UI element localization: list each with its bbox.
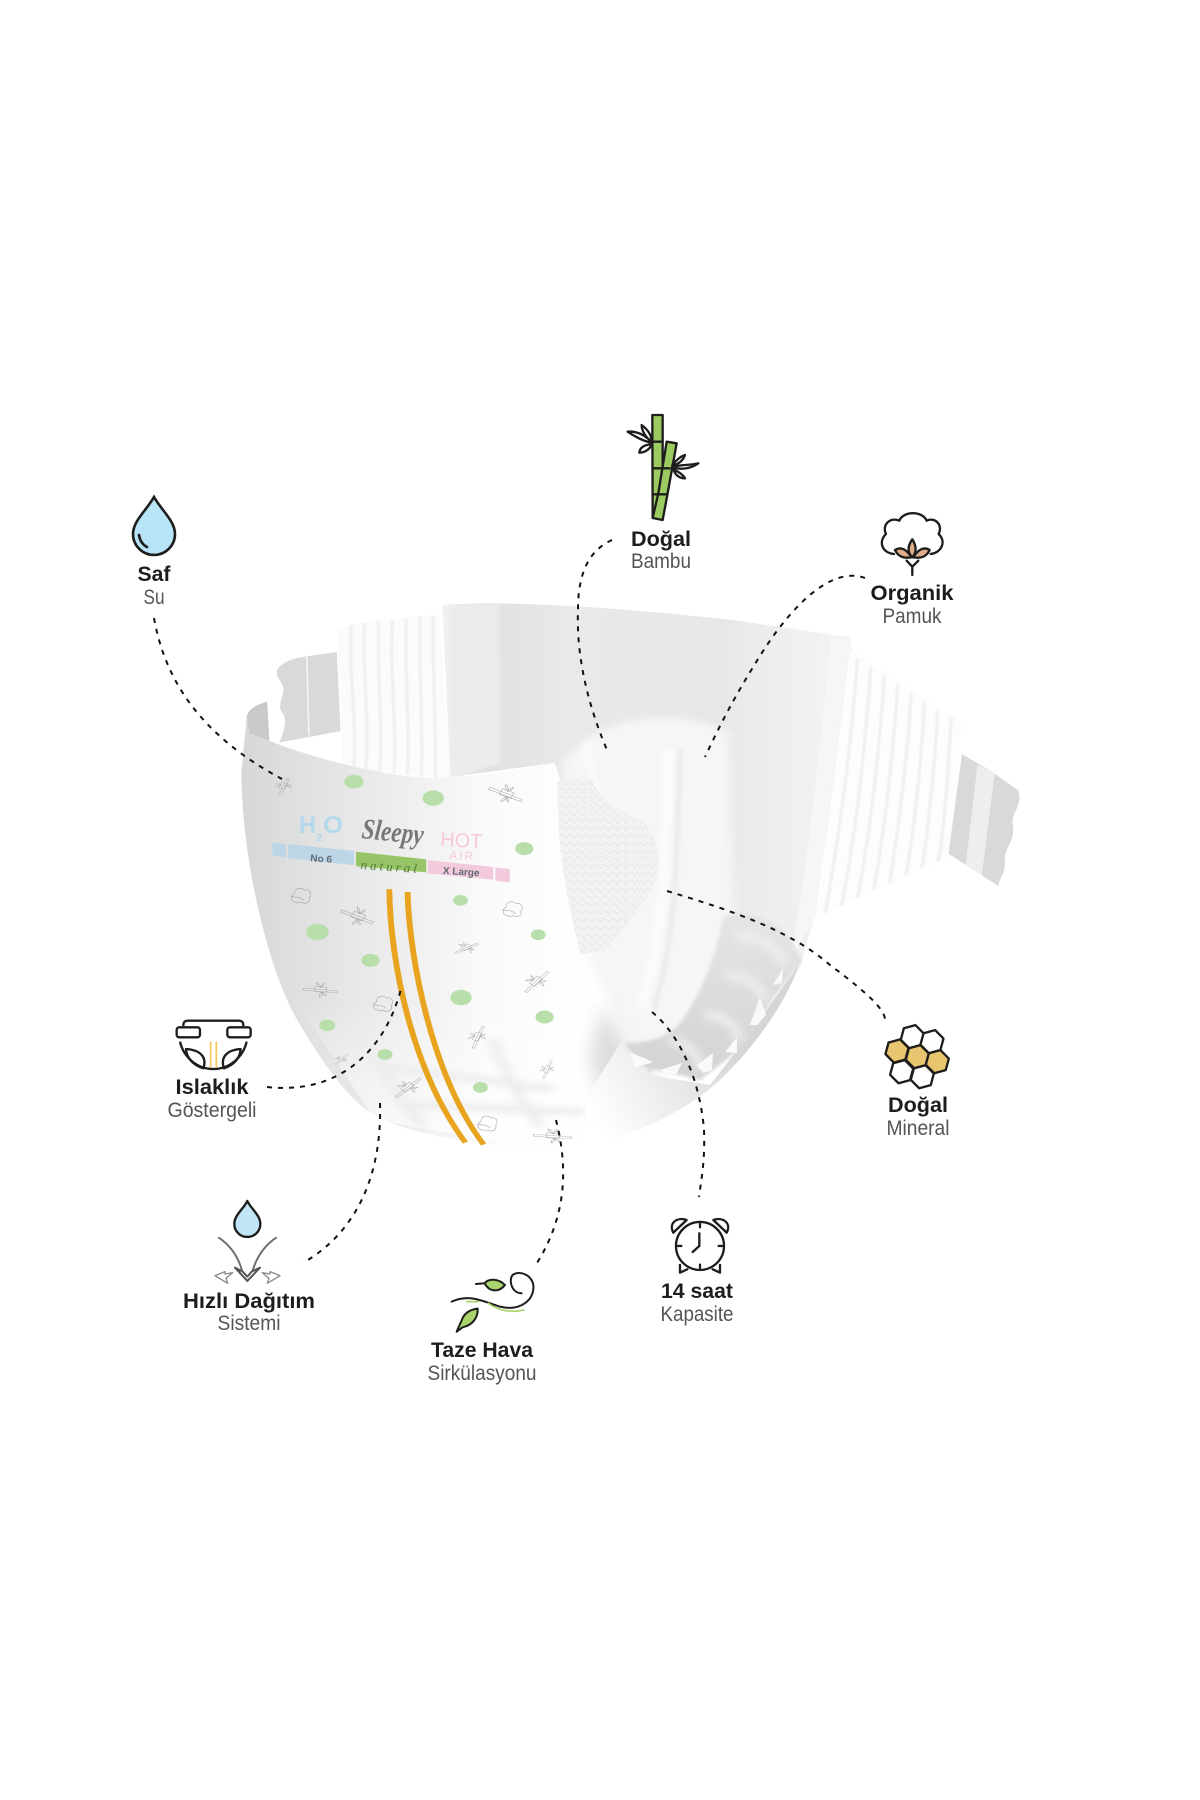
feature: Taze Hava Sirkülasyonu <box>428 1273 536 1385</box>
icon: diaper <box>177 1021 251 1069</box>
feature: 14 saat Kapasite: Kapasite <box>660 1303 734 1326</box>
feature: Islaklık Göstergeli <box>168 1021 256 1122</box>
front edge shadow <box>590 1005 660 1115</box>
icon: alarm clock <box>672 1219 728 1273</box>
feature: Doğal Mineral: Mineral <box>886 1117 950 1140</box>
cuff scallops <box>630 968 783 1078</box>
connector: Organik Pamuk <box>705 576 865 757</box>
feature: Hızlı Dağıtım Sistemi <box>183 1201 315 1335</box>
wetness indicator stripes <box>389 889 484 1144</box>
icon: bamboo <box>628 415 698 520</box>
connector: Saf Su <box>154 618 282 779</box>
feature: Saf Su <box>133 497 175 609</box>
icon: distribution drop and arrows <box>215 1201 280 1283</box>
green dots <box>306 775 554 1093</box>
front panel <box>241 702 643 1146</box>
icon: cotton <box>882 513 943 575</box>
inner leg cuff <box>626 916 802 1081</box>
logo and size text on diaper: AIR <box>449 848 474 863</box>
feature: Doğal Bambu: Doğal <box>631 528 691 551</box>
back left elastic waist <box>337 615 449 779</box>
feature: Organik Pamuk: Pamuk <box>882 605 942 628</box>
feature: Doğal Mineral <box>884 1022 950 1140</box>
connector: 14 saat <box>652 1012 704 1197</box>
feature: Saf Su: Su <box>144 586 164 609</box>
textured mesh patch <box>557 777 659 955</box>
feature: 14 saat Kapasite: 14 saat <box>661 1280 733 1303</box>
diaper illustration <box>241 603 1019 1146</box>
feature: Islaklık Göstergeli: Göstergeli <box>168 1099 256 1122</box>
logo and size text on diaper: O <box>323 812 343 839</box>
feature: Hızlı Dağıtım Sistemi: Sistemi <box>218 1312 280 1335</box>
connector: Hızlı Dağıtım <box>303 1103 380 1263</box>
logo and size text on diaper: No 6 <box>310 853 333 866</box>
lower outer shell <box>585 963 800 1145</box>
logo and size text on diaper: X Large <box>442 866 480 879</box>
feature: Organik Pamuk: Organik <box>870 582 954 605</box>
bamboo and cotton motifs <box>273 777 572 1144</box>
feature: Islaklık Göstergeli: Islaklık <box>176 1076 249 1099</box>
size colour bar <box>272 843 510 882</box>
logo and size text on diaper: Sleepy <box>360 813 425 851</box>
connector: Islaklık <box>267 989 401 1088</box>
right elastic waist <box>818 650 962 916</box>
connector: Doğal Bambu <box>578 540 612 750</box>
feature: Taze Hava Sirkülasyonu: Taze Hava <box>431 1339 533 1362</box>
inner soft highlight <box>450 604 850 1043</box>
logo and size text on diaper <box>299 812 483 879</box>
feature: Saf Su: Saf <box>138 563 172 586</box>
icon: honeycomb <box>884 1022 950 1091</box>
feature: Doğal Bambu: Bambu <box>631 550 691 573</box>
feature: Taze Hava Sirkülasyonu: Sirkülasyonu <box>428 1362 536 1385</box>
feature: Doğal Bambu <box>628 415 698 573</box>
logo and size text on diaper: HOT <box>440 829 483 853</box>
connector: Doğal Mineral <box>667 891 885 1020</box>
icon: water drop <box>133 497 175 555</box>
connector: Taze Hava <box>537 1120 563 1263</box>
feature: Hızlı Dağıtım Sistemi: Hızlı Dağıtım <box>183 1290 315 1313</box>
feature: Doğal Mineral: Doğal <box>888 1094 948 1117</box>
logo and size text on diaper: natural <box>360 857 420 876</box>
left fastening tab <box>277 652 341 743</box>
logo and size text on diaper: H <box>299 812 316 839</box>
icon: fresh air leaves <box>452 1273 533 1332</box>
right fastening tab <box>949 754 1019 886</box>
feature: Organik Pamuk <box>870 513 954 628</box>
logo and size text on diaper: 2 <box>316 832 322 844</box>
inner panel <box>442 603 853 1074</box>
absorbent core channels <box>587 743 681 1009</box>
feature: 14 saat Kapasite <box>660 1219 734 1326</box>
